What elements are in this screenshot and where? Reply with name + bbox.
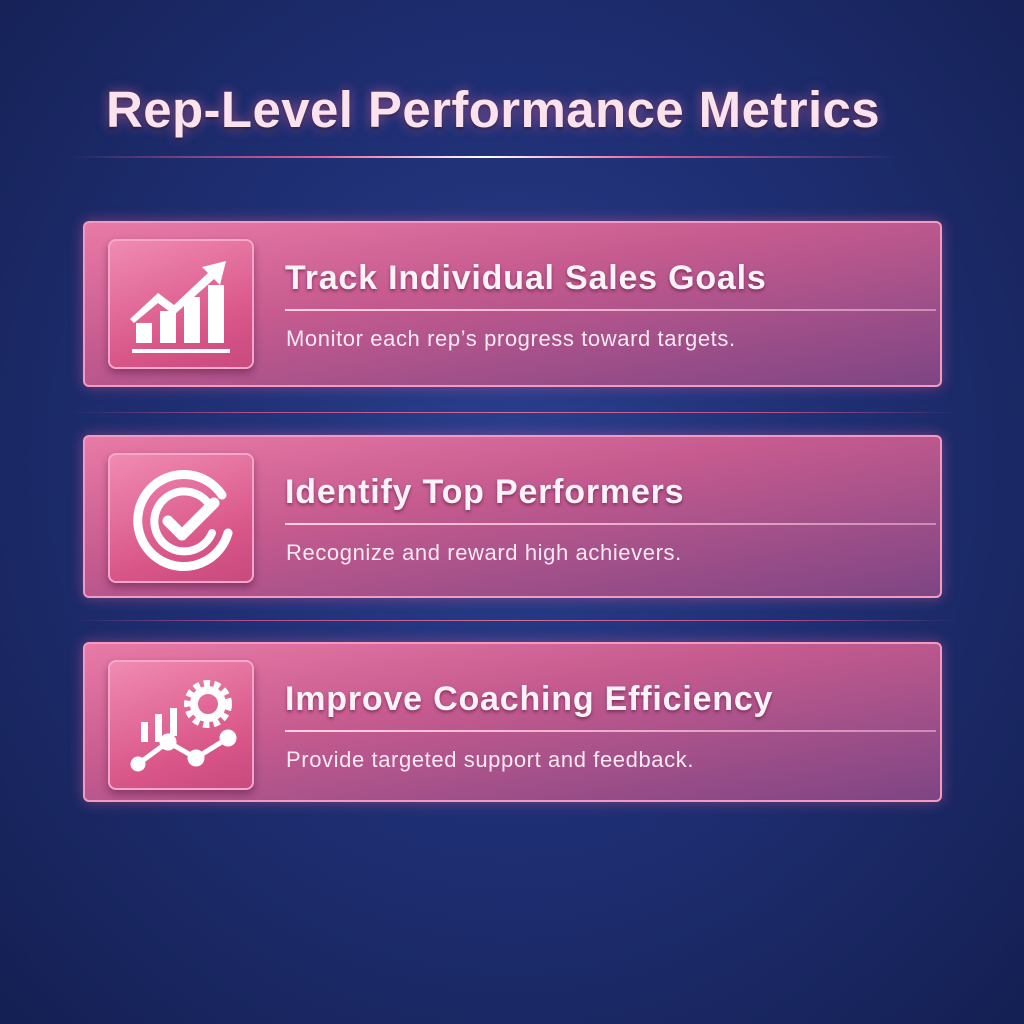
text: Provide targeted support and feedback. bbox=[286, 747, 694, 772]
title: Rep-Level Performance Metrics bbox=[106, 81, 880, 138]
icon: target check bbox=[108, 453, 254, 583]
heading: Improve Coaching Efficiency bbox=[285, 680, 773, 718]
icon: growth chart bbox=[108, 239, 254, 369]
panel: coaching bbox=[83, 642, 942, 802]
panel: top performers bbox=[83, 435, 942, 598]
text: Monitor each rep’s progress toward targets. bbox=[286, 326, 736, 351]
heading: Track Individual Sales Goals bbox=[285, 259, 767, 297]
text: Recognize and reward high achievers. bbox=[286, 540, 682, 565]
panel: track goals bbox=[83, 221, 942, 387]
heading: Identify Top Performers bbox=[285, 473, 684, 511]
icon: gear chart bbox=[108, 660, 254, 790]
